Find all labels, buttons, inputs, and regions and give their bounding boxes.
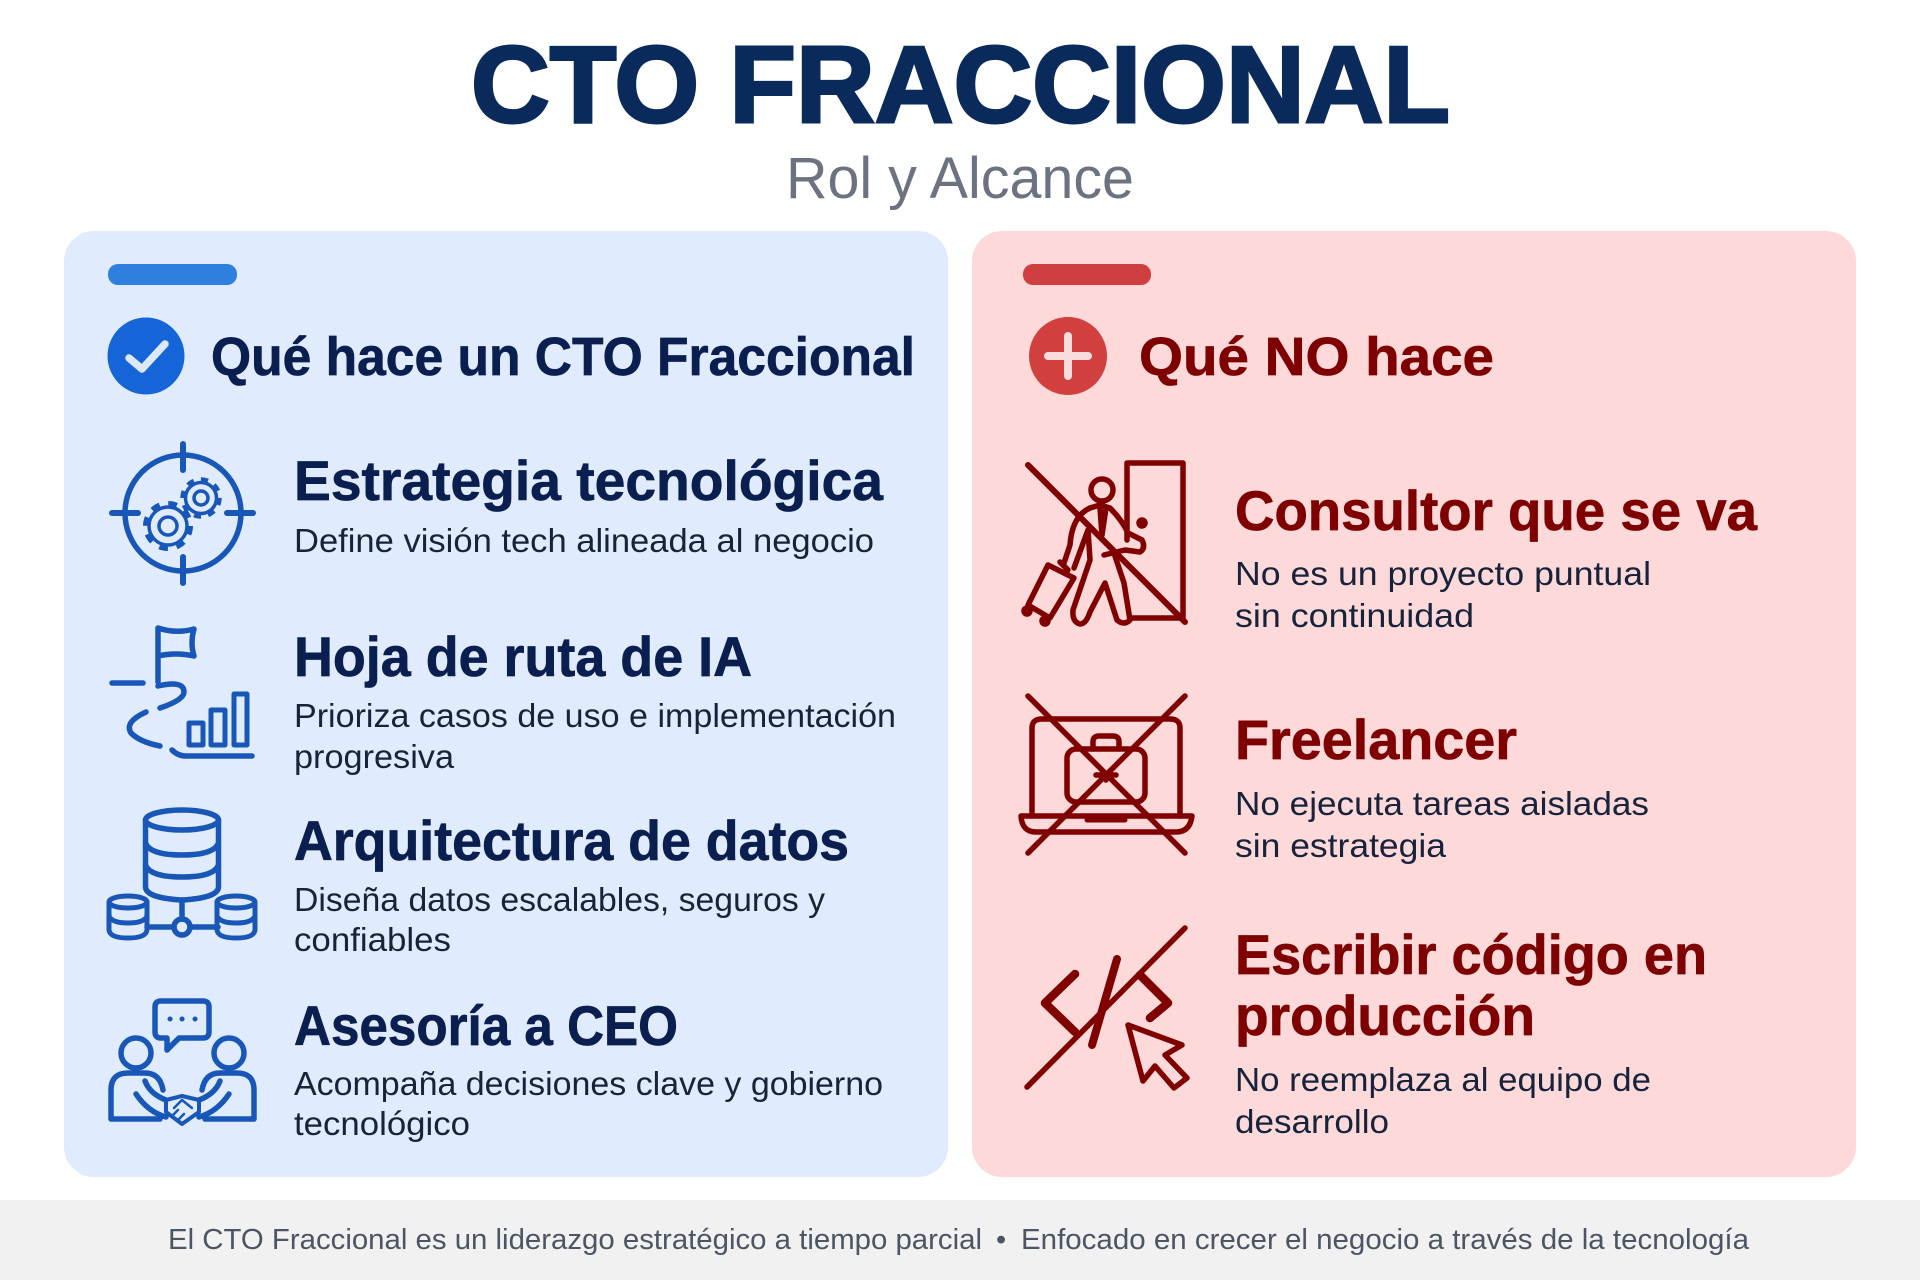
panel background blue: [64, 231, 948, 1177]
icon: plus circle: [1029, 317, 1107, 395]
icon: flag route and bars: [112, 628, 252, 756]
icon: code brackets and cursor, crossed out: [1027, 928, 1187, 1088]
icon: check circle: [108, 318, 184, 394]
item description: No reemplaza al equipo de: [1235, 1061, 1651, 1098]
item title: Escribir código en: [1235, 923, 1707, 986]
item: hoja de ruta de IA: [112, 625, 896, 775]
icon: laptop with briefcase, crossed out: [1021, 696, 1192, 853]
heading text: Qué hace un CTO Fraccional: [211, 327, 915, 387]
icon: consultant leaving through door, crossed out: [1024, 463, 1185, 624]
footer text: Enfocado en crecer el negocio a través de la tecnología: [1021, 1224, 1750, 1256]
heading text: Qué NO hace: [1139, 327, 1494, 387]
item description: [294, 1065, 883, 1142]
panel: qué hace: [64, 231, 948, 1177]
item description: Diseña datos escalables, seguros y: [294, 881, 826, 918]
item description: sin estrategia: [1235, 827, 1447, 864]
item description: No ejecuta tareas aisladas: [1235, 785, 1649, 822]
item description: Define visión tech alineada al negocio: [294, 522, 874, 559]
item: arquitectura de datos: [109, 809, 849, 958]
item: estrategia tecnológica: [112, 444, 884, 583]
footer band: [0, 1200, 1920, 1280]
item description: [1235, 785, 1649, 864]
footer text: •: [996, 1224, 1006, 1256]
panel heading: qué no hace: [1029, 317, 1494, 395]
item description: Acompaña decisiones clave y gobierno: [294, 1065, 883, 1102]
item description: progresiva: [294, 738, 455, 775]
accent bar red: [1023, 264, 1151, 285]
item title: producción: [1235, 984, 1535, 1047]
item: escribir código en producción: [1027, 923, 1707, 1140]
icon: target with gears: [112, 444, 253, 583]
item description: No es un proyecto puntual: [1235, 555, 1651, 592]
item title: [1235, 923, 1707, 1047]
item title: Estrategia tecnológica: [294, 449, 884, 512]
item description: [1235, 555, 1651, 634]
item title: Consultor que se va: [1235, 479, 1758, 542]
item description: confiables: [294, 921, 451, 958]
panel: qué no hace: [972, 231, 1856, 1177]
item description: sin continuidad: [1235, 597, 1474, 634]
panel background red: [972, 231, 1856, 1177]
item: freelancer: [1021, 696, 1649, 864]
item title: Arquitectura de datos: [294, 809, 849, 872]
item title: Asesoría a CEO: [294, 994, 678, 1057]
icon: database network: [109, 810, 255, 938]
item description: [294, 697, 896, 775]
item description: [1235, 1061, 1651, 1140]
item description: Prioriza casos de uso e implementación: [294, 697, 896, 734]
panel heading: qué hace: [108, 318, 915, 394]
item: consultor que se va: [1024, 463, 1758, 634]
item title: Freelancer: [1235, 708, 1517, 771]
subtitle: Rol y Alcance: [786, 146, 1134, 211]
item description: [294, 881, 826, 958]
footer text: [168, 1224, 1750, 1256]
item: asesoría a CEO: [111, 994, 883, 1142]
accent bar blue: [108, 264, 237, 285]
title: CTO FRACCIONAL: [471, 24, 1450, 146]
item description: tecnológico: [294, 1105, 470, 1142]
item title: Hoja de ruta de IA: [294, 625, 752, 688]
icon: handshake with speech bubble: [111, 1001, 254, 1124]
footer text: El CTO Fraccional es un liderazgo estratégico a tiempo parcial: [168, 1224, 982, 1256]
item description: desarrollo: [1235, 1103, 1389, 1140]
